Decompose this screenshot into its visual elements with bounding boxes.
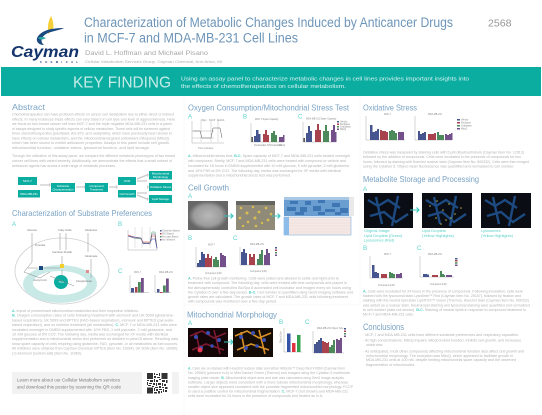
affiliation: Cellular Metabolism Services Group, Cayman Chemical, Ann Arbor, MI (85, 60, 222, 64)
text: abstract body (12, 112, 175, 168)
chart: MCF-7 spare capacity: Oxaliplatin (271, 144, 282, 147)
chart: MDA-MB-231 spare capacity: MitoQ (340, 128, 346, 131)
text: substrate caption: 10 mM glucose at 5% CO2. The following day, media was exchanged for XF media with identical (12, 332, 168, 336)
pathway diagram: Glucose (27, 228, 37, 232)
label A: A (188, 193, 193, 200)
heading: substrate preferences: Characterization of Substrate Preferences (12, 208, 152, 218)
text: oxidative stress caption: Oxidative stress was measured by staining cells with 5 μM dihydroethidium (Cayman Item No. 12013) (363, 150, 524, 154)
chart: MCF-7 spare capacity: MitoQ (279, 144, 285, 147)
label C: C (233, 235, 238, 242)
image labels: Lysosomes (481, 228, 501, 233)
chart: oxygen consumption rates: FAO Based (162, 232, 174, 236)
heading: abstract: Abstract (12, 102, 46, 112)
heading: mitochondrial morphology: Mitochondrial Morphology (187, 310, 278, 320)
chart: oxygen consumption rates: Pyruvate Based (162, 236, 179, 238)
panel: mitochondrial morphology (187, 310, 354, 398)
chart: mitochondrial stress test: Oligo (201, 120, 207, 122)
pathway diagram: Carnitine Shuttle (52, 250, 72, 254)
text: oxidative stress caption (363, 150, 529, 168)
panel labels: A (188, 114, 193, 120)
flow diagram: Compound (89, 184, 104, 188)
chart: MDA-MB-231 oxidative stress: MDA-MB-231 (428, 113, 443, 116)
label B: B (363, 245, 367, 252)
flow diagram: Substrate (57, 184, 70, 188)
text: substrate caption: show spare capacity of cells respiring using glutamine, FAO, pyruvate, or all metabolites as fuel sources. (12, 342, 178, 346)
icon: QR code (147, 373, 168, 394)
text: substrate caption (12, 309, 179, 355)
panel: characterization of substrate preferences (12, 208, 180, 355)
text: conclusions list: · As anticipated, most other compounds affecting mitochondrial function also affect cell growth and (363, 350, 524, 354)
chart: MDA-MB-231 object size (313, 327, 346, 353)
text: abstract body: Through the utilization of this assay panel, we compare the different metabolic phenotypes of two breast (12, 154, 175, 158)
text: morphology caption: A. Cells are co-stained with Hoechst nuclear stain and either MitoLite™ Deep Red FX660 (Cayman Item (188, 366, 345, 370)
text: stress test caption: A. Mitochondrial stress test. B-C. Spare capacity of MCF-7 and MDA-MB-231 cells treated overnight (188, 154, 350, 158)
chart: MDA-MB-231 spare capacity: Vehicle (340, 122, 348, 124)
pathway diagram: Ketoglutarate (76, 279, 92, 283)
panel labels (188, 114, 303, 120)
text: metabolite caption: stained with the lysosomal stain LysoBrite™ Red (Cayman Item No. 25157), followed by fixation and (363, 294, 521, 298)
chart: MDA-MB-231 spare capacity: Oxaliplatin (340, 126, 351, 128)
text: conclusions list (363, 333, 524, 367)
chart: mitochondrial stress test (192, 119, 225, 150)
text: abstract body: mitochondrial function, oxidative stress, lysosomal function, and lipid storage. (12, 146, 150, 150)
text: abstract body: we focus on two breast cancer cell lines MCF-7 and the triple negative MDA-MB-231 cells in a panel (12, 122, 172, 126)
panel: oxidative stress (363, 102, 529, 168)
table: data (284, 217, 351, 235)
text: abstract body: which has been shown to exhibit anticancer properties. Assays in this panel include cell growth, (12, 141, 170, 145)
flow diagram: MDA-MB-231 (20, 192, 38, 196)
text: substrate caption: incubated overnight in DMEM supplemented with 10% FBS, 1 mM pyruvate, 2 mM glutamine, and (12, 328, 172, 332)
chart: MCF-7 spare capacity: AG-879 (263, 144, 272, 147)
image labels: (Yellow Highlights) (422, 233, 455, 238)
label B: B (118, 221, 122, 228)
flow diagram: Characterization (52, 188, 74, 192)
flow diagram: Treatment (90, 188, 103, 192)
image: stained mitochondria yellow (233, 328, 273, 357)
panel: cell growth (188, 182, 354, 304)
title: in MCF-7 and MDA-MB-231 Cell Lines (84, 30, 298, 46)
panel labels: C (305, 319, 310, 326)
text: conclusions list: oxidative stress. (366, 343, 383, 347)
label B: B (188, 235, 192, 242)
text: conclusions list: · MCF-7 and MDA-MB-231 cells have different substrate preferences and respiratory capacities. (363, 333, 519, 337)
text: abstract body: have effects on cellular metabolism, and the mitochondrial-targeted antioxidant mitoquinol (MitoQ), (12, 136, 170, 140)
chart: MCF-7 growth: Compound (nM) (205, 273, 222, 275)
arrow (224, 340, 233, 344)
flow diagram: Mitochondrial (152, 172, 169, 176)
panel labels: A (188, 320, 193, 327)
text: conclusions list: MDA-MB-231 cells at 100 nM, despite limiting mitochondrial spare capacity and the observed (366, 358, 516, 362)
panel: oxygen consumption / mitochondrial stress test (188, 102, 351, 178)
text: substrate caption: based respiration), UK 5099 and BPTES (FAO-based respiration), etomoxir and BPTES (pyruvate- (12, 318, 175, 322)
pathway diagram: TCA (58, 280, 64, 284)
callout: QR code: Learn more about our Cellular Metabolism services (17, 378, 121, 382)
image: original stain (364, 193, 413, 228)
text: stress test caption: with compound. Briefly, MCF-7 and MDA-MB-231 cells were treated with compound or vehicle and (188, 159, 346, 163)
chart: MDA-MB-231 lipid storage (420, 253, 458, 286)
image labels: Lipid Droplets (Green) (364, 233, 403, 238)
text: cell growth caption: the atmospherically controlled BioSpa 8 automated cell incubator and imaged every six hours using (188, 286, 351, 290)
authors: David L. Hoffman and Michael Pisano (85, 50, 208, 57)
image labels (364, 228, 514, 242)
chart: mitochondrial stress test: FCCP (209, 120, 216, 122)
chart: mitochondrial object area (280, 328, 302, 352)
pathway diagram: Glutamate (85, 254, 98, 258)
text: cell growth caption: the Cytation 5 over a five-day period. B-C. Cell number is quantified using Gen5 imaging software and (188, 290, 353, 294)
text: conclusions list: fragmentation of mitochondria. (366, 363, 415, 367)
text: metabolite caption (363, 289, 530, 317)
chart: mitochondrial stress test: Time (minutes) (198, 147, 213, 150)
chart: oxygen consumption rates: No Inhibitors (162, 238, 176, 242)
chart: MCF-7 spare capacity (251, 118, 285, 147)
label C: C (417, 245, 422, 252)
chart: MCF-7 oxidative stress (366, 114, 405, 140)
text: morphology caption: imaging plate reader. B. Mitochondrial object area and size was calculated using Gen5 image analysis (188, 376, 344, 380)
image: lysosomes (481, 193, 531, 228)
text: oxidative stress caption: using the Cytation 5. Object mean fluorescence was quantified and normalized to cell number. (363, 164, 514, 168)
image: lipid droplets (422, 193, 472, 228)
text: cell growth caption: A. Probe-free cell growth monitoring. Cells were plated and allowed to settle overnight prior to (188, 276, 339, 280)
chart: MDA-MB-231 substrate (155, 271, 174, 293)
image labels: Lipid Droplets (422, 228, 446, 233)
callout: QR code (12, 372, 179, 394)
logo: Cayman Chemical (11, 16, 79, 64)
chart: MDA-MB-231 object size: MDA-MB-231 Object Size (317, 327, 344, 330)
chart: MCF-7 substrate (130, 272, 149, 292)
chart: MCF-7 growth: MCF-7 (208, 244, 216, 246)
text: abstract body: cancer cell lines with varied severity. Additionally, we demonstrate the effects that a small subset of (12, 159, 173, 163)
key finding banner: Using an assay panel to characterize metabolic changes in cell lines provides important insights into (181, 76, 469, 82)
text: oxidative stress caption: followed by the addition of compounds. Cells were incubated in the presence of compounds for two (363, 155, 521, 159)
text: substrate caption: (+)-Etomoxir (sodium salt) (Item No. 11969). (12, 351, 82, 355)
panel labels: B (243, 114, 247, 120)
chart: MDA-MB-231 spare capacity: Paclitaxel (340, 123, 350, 126)
text: abstract body: anticancer agents has across a wide range of metabolic processes. (12, 164, 116, 168)
chart: MDA-MB-231 growth: Compound (nM) (250, 271, 267, 273)
panel: metabolite storage and processing (363, 174, 531, 317)
heading: oxygen consumption: Oxygen Consumption/Mitochondrial Stress Test (188, 102, 350, 112)
chart: MCF-7 growth (196, 244, 227, 275)
text: cell growth caption: treatment with compound. The following day, cells were treated with test compounds and placed in (188, 281, 347, 285)
image: brightfield cells (188, 201, 228, 230)
key finding banner: the effects of chemotherapeutics on cellular metabolism. (181, 84, 346, 90)
panel labels: B (279, 319, 283, 326)
key finding banner: KEY FINDING (73, 74, 171, 92)
text: stress test caption (188, 154, 350, 178)
chart: MCF-7 lipid storage (370, 254, 403, 287)
pathway diagram: Glutamine (85, 228, 98, 232)
chart: MDA-MB-231 lipid storage: Compound (nM) (430, 284, 447, 286)
chart: MDA-MB-231 growth: MDA-MB-231 (250, 243, 265, 246)
arrow (410, 208, 419, 212)
text: metabolite caption: was added as a nuclear stain. Neutral lipid staining and lysosomal staining were quantified and normalized (363, 303, 530, 307)
chart: MDA-MB-231 spare capacity (303, 118, 351, 142)
flow diagram: MCF-7 (23, 179, 32, 183)
chart: MDA-MB-231 oxidative stress: Paclitaxel (461, 122, 471, 124)
callout: QR code: and download this poster by scanning the QR code (17, 384, 121, 390)
heading: oxidative stress: Oxidative Stress (363, 102, 417, 112)
text: stress test caption: and 10% FBS at 5% CO2. The following day, media was exchanged for XF media with identical (188, 169, 341, 173)
text: morphology caption (188, 366, 354, 398)
image labels: Original Image: (364, 228, 390, 233)
chart: MDA-MB-231 oxidative stress: MitoQ (461, 128, 467, 130)
label C: C (118, 268, 123, 275)
logo: Cayman Chemical: Cayman (11, 44, 79, 61)
chart: MDA-MB-231 oxidative stress: Vehicle (461, 120, 469, 122)
heading: conclusions: Conclusions (363, 322, 404, 332)
flow diagram: Cell Growth (119, 192, 135, 196)
pathway diagram: Acetyl-CoA (33, 278, 47, 282)
chart: MCF-7 oxidative stress: MCF-7 (384, 114, 392, 116)
chart: MDA-MB-231 growth (240, 243, 277, 273)
text: morphology caption: cells were incubated for 24 hours in the presence of compounds and treated as in A. (188, 394, 323, 398)
text: oxidative stress caption: hours, followed by staining with Hoechst nuclear stain (Cayman Item No. 600332). Cells were then imaged (363, 160, 529, 164)
flow diagram: Morphology (153, 175, 169, 179)
table: heat map (284, 197, 354, 216)
text: substrate caption: B. Oxygen consumption rates of cells following treatment with etomoxir and UK 5099 (glutamine- (12, 314, 175, 318)
panel: conclusions (363, 322, 524, 367)
chart: MDA-MB-231 spare capacity: MDA-MB-231 Spare Capacity (306, 118, 337, 120)
chart: MCF-7 lipid storage: MCF-7 (384, 254, 392, 256)
text: morphology caption: No. 25560) (pictured in A) or MitoTracker Green (Thermo) and imaged using the Cytation 5 multimode (188, 371, 350, 375)
chart: mitochondrial stress test: Rot/AA (217, 119, 225, 122)
chart: MDA-MB-231 oxidative stress (415, 113, 472, 140)
chart: MCF-7 lipid storage: Compound (nM) (378, 285, 395, 287)
flow diagram: OCR (124, 179, 130, 183)
image: stained mitochondria red (188, 328, 228, 357)
text: morphology caption: software. Larger objects were consistent with a more tubular mitochondrial morphology, whereas (188, 380, 348, 384)
text: cell growth caption (188, 276, 353, 304)
panel labels: C (298, 114, 303, 120)
pathway diagram: Pyruvate (35, 243, 46, 247)
panel labels (188, 319, 310, 327)
text: morphology caption: smaller object size appeared consistent with the punctate fragmented mitochondrial morphology. FCCP (188, 385, 354, 389)
text: cell growth caption: with compounds was monitored over a five-day period. (188, 300, 277, 304)
text: stress test caption: supplementation and a mitochondrial stress test was performed. (188, 174, 291, 178)
flow diagram: Oxidative Stress (150, 185, 172, 189)
text: metabolite caption: A. Cells were incubated for 24 hours in the presence of compounds. Following incubation, cells were (363, 289, 523, 293)
text: morphology caption: is used a positive control for mitochondrial fragmentation. C. MCF-7 (not shown) and MDA-MB-231 (188, 390, 348, 394)
heading: cell growth: Cell Growth (188, 182, 229, 192)
text: abstract body: of assays designed to study specific aspects of cellular metabolism. These cells will be screened against (12, 127, 170, 131)
label A: A (363, 186, 368, 193)
image labels: Lysosomes (Red) (364, 238, 395, 242)
chart: MCF-7 substrate: MCF-7 (134, 272, 142, 274)
text: metabolite caption: MCF-7 and MDA-MB-231 cells. (363, 313, 414, 317)
panel: abstract (12, 102, 175, 203)
logo: Cayman Chemical: CHEMICAL (40, 60, 78, 64)
text: substrate caption: All inhibitors were obtained from Cayman Chemical: BPTES (Item No. 19284), UK 5099 (Item No. 16980), (12, 347, 178, 351)
title (84, 15, 453, 46)
pathway diagram: Fatty Acids (58, 228, 72, 232)
chart: oxygen consumption rates: Glutamine Based (162, 230, 180, 232)
chart: oxygen consumption rates (128, 227, 180, 250)
text: metabolite caption: to cell number (data not shown). B-C. Staining of neutral lipids in response to compound treatment in (363, 308, 526, 312)
arrow (272, 214, 280, 218)
text: abstract body: three chemotherapeutics (paclitaxel, AG-879, and oxaliplatin), which have previously been shown to (12, 132, 172, 136)
flow diagram (18, 171, 172, 203)
pathway diagram (15, 228, 109, 304)
chart: MDA-MB-231 oxidative stress: Oxaliplatin (461, 124, 472, 128)
text: substrate caption: A. Import of predominant mitochondrial metabolites and their respective inhibitors. (12, 309, 139, 313)
image labels: (Yellow Highlights) (481, 233, 514, 238)
chart: MCF-7 spare capacity: Paclitaxel (254, 144, 264, 147)
poster number: 2568 (488, 18, 512, 30)
text: conclusions list: mitochondrial morphology. The exception was MitoQ, which appeared to facilitate growth in (366, 354, 513, 358)
title: Characterization of Metabolic Changes Induced by Anticancer Drugs (84, 15, 453, 30)
chart: MCF-7 spare capacity: MCF-7 Spare Capacity (255, 118, 279, 121)
text: substrate caption: supplementation and a mitochondrial stress test performed as detailed in panel B above. Resulting data (12, 337, 179, 341)
chart: MDA-MB-231 substrate: MDA-MB-231 (159, 271, 174, 274)
flow diagram: Lipid Storage (152, 197, 169, 201)
text: abstract body: effects. In many instances these effects can vary based on cell type and level of aggressiveness. Here (12, 117, 175, 121)
text: conclusions list: · At high concentrations, MitoQ impairs mitochondrial function, inhibits cell growth, and increases (363, 338, 521, 342)
text: cell growth caption: growth rates are calculated. The growth rates of MCF-7 and MDA-MB-231 cells following treatment (188, 295, 348, 299)
key finding banner (1, 67, 541, 96)
arrow (224, 214, 233, 218)
chart: MDA-MB-231 lipid storage: MDA-MB-231 (428, 253, 443, 256)
heading: metabolite storage: Metabolite Storage and Processing (363, 174, 479, 184)
text: abstract body: Chemotherapeutics can have profound effects on cancer cell metabolism due to either direct or indirect (12, 112, 174, 116)
image: segmented cells (236, 201, 275, 230)
text: substrate caption: based respiration), and no inhibitor treatment (all metabolites). C. MCF-7 or MDA-MB-231 cells were (12, 323, 177, 327)
text: stress test caption: incubated for 18 hours in DMEM supplemented with 10 mM glucose, 5 mM pyruvate, 2 mM glutamine, (188, 164, 350, 168)
label A: A (12, 221, 17, 228)
chart: mitochondrial object area: Object Size (280, 331, 282, 343)
text: metabolite caption: staining with the neutral lipid stain LipidTOX™ Green (Thermo). Hoechst stain (Cayman Item No. 600332) (363, 299, 529, 303)
